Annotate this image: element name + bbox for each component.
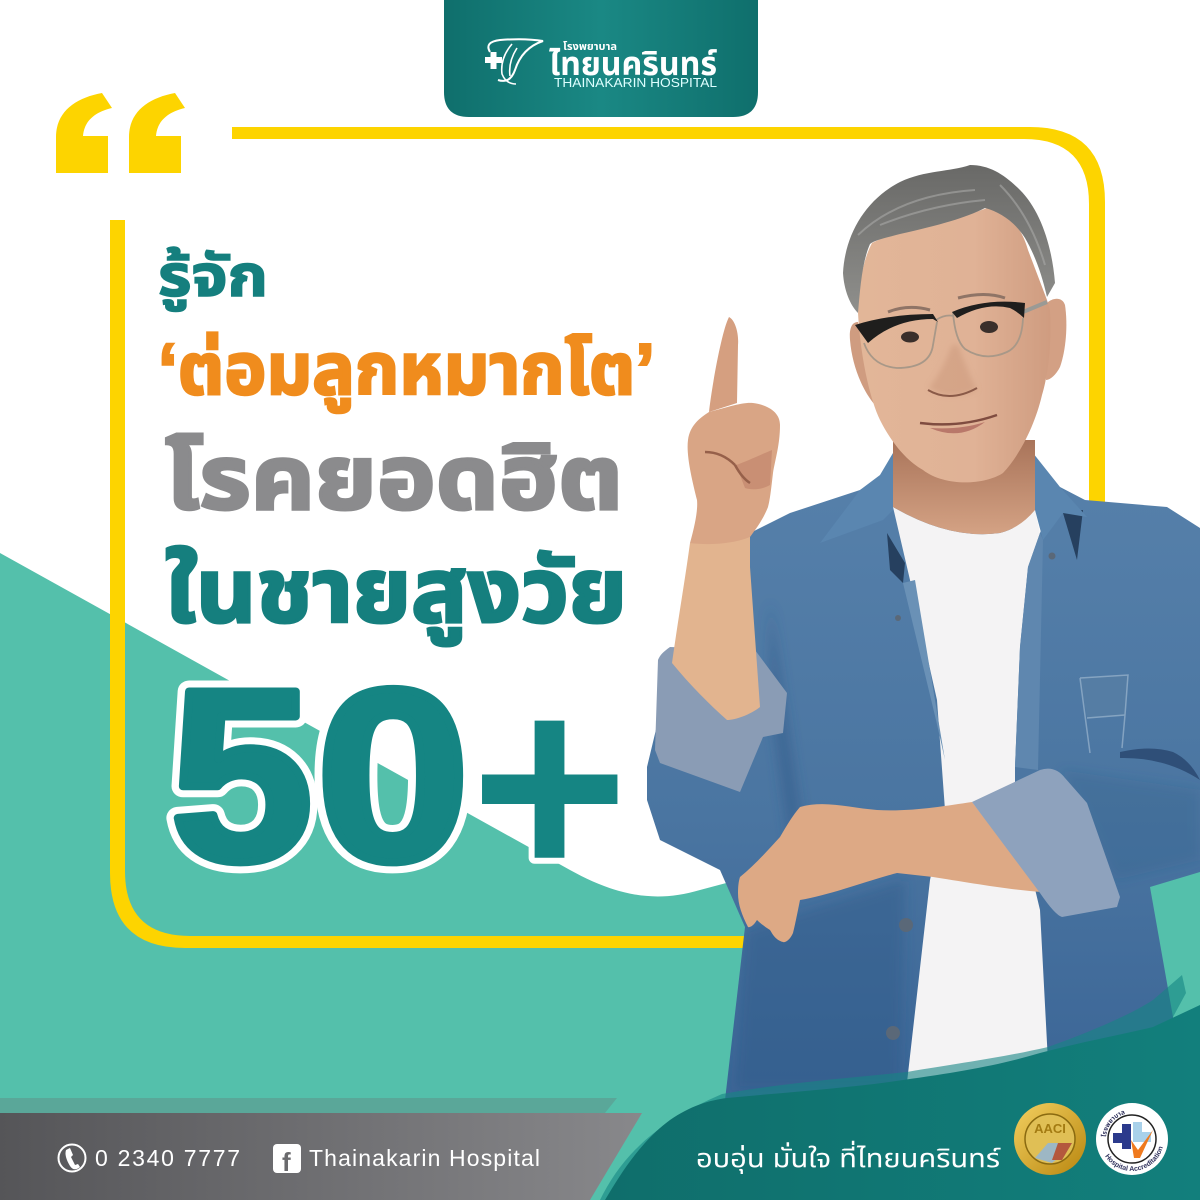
big number 50+: 0 [316, 639, 470, 912]
big number 50+: + [471, 636, 628, 937]
curled fingers [705, 450, 772, 489]
fist [688, 403, 780, 544]
shirt fold shading [742, 650, 902, 1020]
right collar [1033, 453, 1087, 540]
shirt collar [820, 453, 893, 543]
yellow speech frame [110, 127, 1105, 948]
chest pocket [1080, 675, 1128, 753]
face [858, 208, 1051, 482]
left ear [1046, 299, 1066, 380]
hospital accreditation badge: โรงพยาบาล [1100, 1110, 1125, 1136]
headline line 3: โรคยอดฮิต [165, 429, 623, 529]
dark teal wave [605, 1005, 1200, 1200]
footer tagline: อบอุ่น มั่นใจ ที่ไทยนครินทร์ [696, 1140, 1001, 1174]
icon: logo cross and T mark [485, 39, 543, 84]
translucent wave layer [600, 975, 1186, 1200]
hospital accreditation badge: Hospital Accreditation [1105, 1146, 1163, 1171]
quotation mark icon [56, 93, 185, 173]
mouth [920, 415, 997, 433]
forearm raised [672, 537, 760, 720]
glasses [855, 302, 1047, 368]
shirt placket strips [903, 533, 1043, 770]
facebook name: Thainakarin Hospital [309, 1145, 540, 1171]
right rolled cuff [972, 769, 1120, 917]
pointing finger [709, 317, 738, 412]
big number 50+: 5 [170, 640, 313, 913]
gold accreditation badge: AACI [1034, 1121, 1066, 1136]
big number 50+ [170, 636, 628, 937]
eyes [901, 332, 919, 342]
big number 50+: + [471, 636, 628, 937]
rolled cuff left [655, 647, 787, 792]
collar shadow [887, 510, 1083, 583]
photo of senior man pointing [647, 165, 1200, 1100]
headline line 4: ในชายสูงวัย [165, 542, 627, 646]
bottom teal waves [600, 975, 1200, 1200]
footer grey band [0, 1098, 642, 1200]
icon: facebook: f [282, 1147, 291, 1177]
gold accreditation badge [1014, 1103, 1086, 1175]
hair [843, 165, 1055, 313]
logo english name: THAINAKARIN HOSPITAL [554, 76, 717, 90]
nose [928, 345, 977, 396]
big number 50+: 0 [316, 639, 470, 912]
teal background wave [0, 553, 1200, 1200]
logo main name: ไทยนครินทร์ [549, 45, 717, 82]
lower forearm crossing [738, 802, 1043, 942]
denim shirt body [647, 470, 1200, 1100]
logo small name: โรงพยาบาล [563, 41, 617, 53]
headline line 1: รู้จัก [158, 244, 268, 312]
eyebrows [888, 294, 1005, 312]
neck [893, 440, 1035, 534]
phone number: 0 2340 7777 [95, 1145, 240, 1171]
header logo tab [444, 0, 758, 117]
white t-shirt [893, 507, 1050, 1100]
icon: facebook [273, 1144, 301, 1177]
arm fold dark [1120, 748, 1200, 780]
headline line 2: ‘ต่อมลูกหมากโต’ [158, 330, 655, 413]
big number 50+: 5 [170, 640, 313, 913]
hospital accreditation badge [1096, 1103, 1168, 1175]
icon: phone [58, 1144, 86, 1172]
shirt buttons [886, 552, 1056, 1040]
right ear [850, 322, 875, 405]
